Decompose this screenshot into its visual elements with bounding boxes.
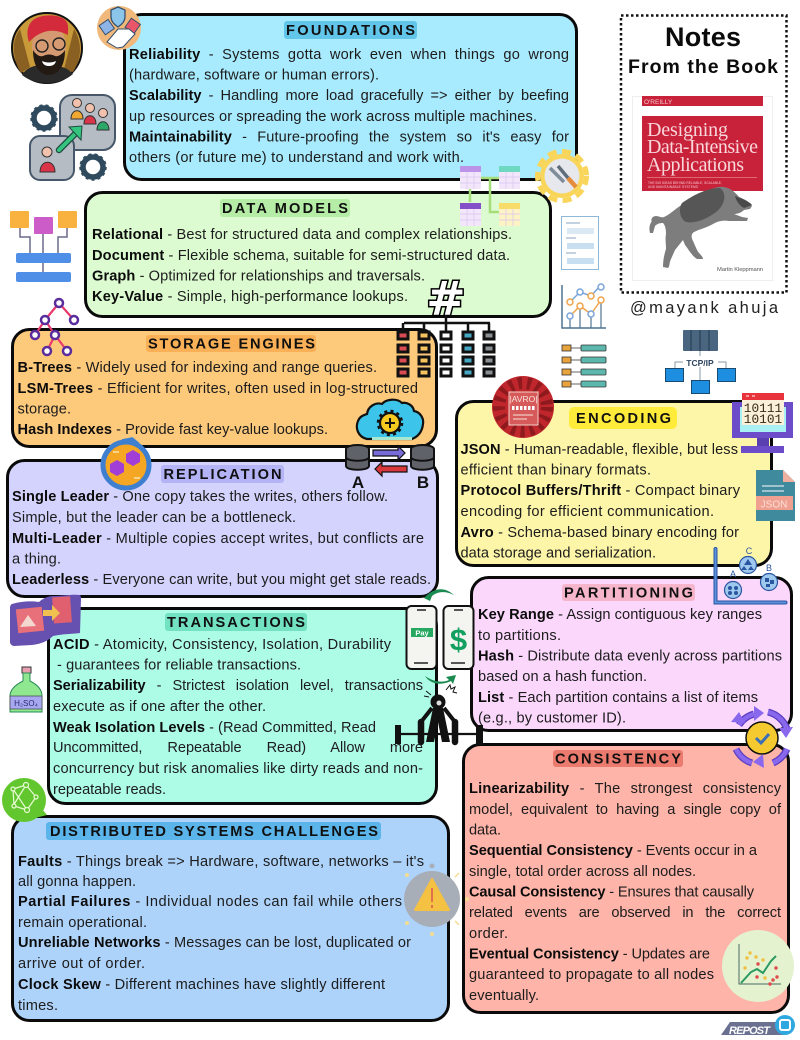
text: replication body: Multi-Leader - Multiple copies accept writes, but conflicts are <box>12 531 424 547</box>
text: foundations body: Scalability - Handling more load gracefully => either by beefing <box>129 88 569 104</box>
text: foundations body: up resources or spreading the work across multiple machines. <box>129 109 537 125</box>
icon: author portrait <box>12 13 82 83</box>
panel: storage engines <box>12 330 436 446</box>
icon: database replication: A <box>352 473 364 492</box>
text: storage engines body: B-Trees - Widely used for indexing and range queries. <box>18 360 377 376</box>
heading: transactions: TRANSACTIONS <box>167 615 305 631</box>
panel: foundations <box>124 14 576 180</box>
icon: acid bottle: H₂SO₄ <box>14 699 38 708</box>
text: transactions body <box>53 637 423 798</box>
text: encoding body: JSON - Human-readable, flexible, but less <box>460 442 738 458</box>
heading: foundations: FOUNDATIONS <box>286 23 415 39</box>
panel: data models <box>86 192 550 316</box>
text: replication body: a thing. <box>12 552 61 568</box>
icon: handshake badge <box>97 6 141 50</box>
text: consistency body: Eventual Consistency - Updates are <box>469 946 710 962</box>
text: partitioning body: to partitions. <box>478 628 561 644</box>
panel: encoding <box>456 402 772 566</box>
text: storage engines body <box>18 360 418 438</box>
icon: hash tree <box>398 272 494 376</box>
text: distributed systems body: Unreliable Networks - Messages can be lost, duplicated or <box>18 935 411 951</box>
text: partitioning body: based on a hash function. <box>478 669 647 685</box>
text: encoding body: Protocol Buffers/Thrift - Compact binary <box>460 483 741 499</box>
icon: cloud gear <box>357 400 423 440</box>
panel: distributed systems challenges <box>12 816 448 1020</box>
text: replication body: Leaderless - Everyone can write, but you might get stale reads. <box>12 572 431 588</box>
icon: payment phones <box>406 589 474 684</box>
book cover: Applications <box>647 154 744 176</box>
panel: replication <box>8 460 438 596</box>
icon: avro badge: |AVRO| <box>510 394 537 404</box>
icon: scatter chart <box>722 930 794 1002</box>
text: distributed systems body: all gonna happen. <box>18 874 136 890</box>
text: distributed systems body: times. <box>18 998 58 1014</box>
text: consistency body: guaranteed to propagate to all nodes <box>469 967 714 983</box>
book cover: THE BIG IDEAS BEHIND RELIABLE, SCALABLE, <box>648 181 722 185</box>
icon: payment phones: $ <box>450 622 467 657</box>
panel: transactions <box>48 608 436 804</box>
heading: distributed systems challenges: DISTRIBUTED SYSTEMS CHALLENGES <box>50 824 378 840</box>
text: consistency body <box>469 781 782 1004</box>
icon: json file: JSON <box>761 500 787 510</box>
heading: notes: Notes <box>665 22 741 52</box>
icon: binary monitor: 10111 <box>744 401 783 416</box>
icon: tree nodes <box>31 299 78 355</box>
text: distributed systems body <box>18 854 424 1014</box>
icon: avro badge <box>492 376 554 438</box>
text: transactions body: concurrency but risk anomalies like dirty reads and non- <box>53 761 423 777</box>
panel: book notes <box>621 16 786 292</box>
icon: database replication <box>346 445 434 492</box>
heading: replication: REPLICATION <box>164 467 282 483</box>
text: foundations body: Reliability - Systems gotta work even when things go wrong <box>129 47 569 63</box>
text: data models body: Document - Flexible schema, suitable for semi-structured data. <box>92 248 510 264</box>
book cover: AND MAINTAINABLE SYSTEMS <box>648 185 698 189</box>
icon: repost badge <box>721 1015 795 1037</box>
text: data models body: Relational - Best for structured data and complex relationships. <box>92 227 512 243</box>
text: transactions body: Serializability - Strictest isolation level, transactions <box>53 678 423 694</box>
text: distributed systems body: Partial Failures - Individual nodes can fail while others <box>18 894 402 910</box>
text: consistency body: model, equivalent to having a single copy of <box>469 802 782 818</box>
icon: cycle check <box>731 706 793 768</box>
text: transactions body: Weak Isolation Levels - (Read Committed, Read <box>53 720 376 736</box>
text: encoding body <box>460 442 741 562</box>
text: storage engines body: LSM-Trees - Efficient for writes, often used in log-structured <box>18 381 418 397</box>
text: distributed systems body: arrive out of order. <box>18 956 145 972</box>
text: encoding body: efficient than binary formats. <box>460 462 651 478</box>
icon: team scaling <box>30 95 115 180</box>
text: consistency body: single, total order across all nodes. <box>469 864 696 880</box>
text: transactions body: repeatable reads. <box>53 782 166 798</box>
icon: tcp/ip network <box>666 330 736 394</box>
text: consistency body: Causal Consistency - Ensures that causally <box>469 884 755 900</box>
text: replication body: Single Leader - One copy takes the writes, others follow. <box>12 489 388 505</box>
text: partitioning body: List - Each partition contains a list of items <box>478 690 758 706</box>
icon: acid bottle <box>10 667 42 712</box>
icon: data model diagram <box>10 211 77 282</box>
icon: warning <box>404 864 469 936</box>
text: foundations body: others (or future me) to understand and work with. <box>129 150 464 166</box>
text: partitioning body: Key Range - Assign contiguous key ranges <box>478 607 762 623</box>
book cover: O'REILLY <box>644 99 673 106</box>
text: consistency body: related events are observed in the correct <box>469 905 781 921</box>
icon: linked tables <box>460 166 520 226</box>
text: storage engines body: storage. <box>18 402 71 418</box>
text: consistency body: order. <box>469 926 508 942</box>
text: transactions body: - guarantees for reliable transactions. <box>57 658 301 674</box>
icon: partition axes: A <box>730 569 736 579</box>
text: consistency body: Linearizability - The strongest consistency <box>469 781 782 797</box>
heading: storage engines: STORAGE ENGINES <box>148 336 315 352</box>
text: replication body <box>12 489 431 588</box>
icon: green network bubble <box>2 778 47 822</box>
boar illustration <box>649 187 752 268</box>
text: data models body <box>92 227 512 305</box>
icon: line chart <box>562 284 606 328</box>
book cover: Data-Intensive <box>647 136 758 158</box>
icon: flow list <box>562 345 606 387</box>
icon: partition axes: B <box>766 563 772 573</box>
text: encoding body: encoding for efficient communication. <box>460 504 714 520</box>
heading: from the book: From the Book <box>628 56 778 78</box>
heading: consistency: CONSISTENCY <box>555 752 681 768</box>
icon: repost badge: REPOST <box>729 1025 771 1037</box>
text: partitioning body: (e.g., by customer ID). <box>478 710 626 726</box>
text: storage engines body: Hash Indexes - Provide fast key-value lookups. <box>18 422 328 438</box>
text: consistency body: Sequential Consistency - Events occur in a <box>469 843 758 859</box>
icon: partition axes <box>716 546 786 602</box>
icon: database replication: B <box>417 473 429 492</box>
heading: encoding: ENCODING <box>576 411 671 427</box>
text: replication body: Simple, but the leader can be a bottleneck. <box>12 510 296 526</box>
icon: document <box>562 216 598 270</box>
text: data models body: Key-Value - Simple, high-performance lookups. <box>92 289 408 305</box>
icon: binary monitor: 10101 <box>744 412 783 427</box>
heading: data models: DATA MODELS <box>222 201 348 217</box>
heading: partitioning: PARTITIONING <box>564 586 693 602</box>
text: data models body: Graph - Optimized for relationships and traversals. <box>92 268 425 284</box>
text: foundations body: Maintainability - Future-proofing the system so it's easy for <box>129 130 569 146</box>
text: transactions body: ACID - Atomicity, Consistency, Isolation, Durability <box>53 637 392 653</box>
text: consistency body: eventually. <box>469 988 539 1004</box>
icon: repair gear <box>538 152 586 200</box>
icon: binary monitor <box>732 393 793 453</box>
text: foundations body: (hardware, software or human errors). <box>129 68 379 84</box>
book cover: Designing <box>647 119 728 141</box>
text: partitioning body: Hash - Distribute data evenly across partitions <box>478 648 782 664</box>
text: distributed systems body: Faults - Things break => Hardware, software, networks – it's <box>18 854 424 870</box>
book cover: Martin Kleppmann <box>717 267 763 273</box>
icon: image transfer <box>10 595 81 646</box>
text: transactions body: execute as if one after the other. <box>53 699 266 715</box>
panel: consistency <box>464 744 788 1012</box>
text: transactions body: Uncommitted, Repeatable Read) Allow more <box>53 740 423 756</box>
text: encoding body: Avro - Schema-based binary encoding for <box>460 525 739 541</box>
text: distributed systems body: remain operational. <box>18 915 147 931</box>
icon: hash tree: # <box>426 272 466 327</box>
book cover <box>632 96 772 280</box>
icon: payment phones: Pay <box>415 628 429 638</box>
text: encoding body: data storage and serialization. <box>460 546 656 562</box>
text: distributed systems body: Clock Skew - Different machines have slightly different <box>18 977 385 993</box>
text: consistency body: data. <box>469 822 501 838</box>
icon: replication badge <box>103 439 149 488</box>
text: partitioning body <box>478 607 782 726</box>
icon: partition axes: C <box>746 546 753 556</box>
icon: tcp/ip network: TCP/IP <box>686 358 714 368</box>
text: author handle: @mayank ahuja <box>630 299 779 317</box>
heading: encoding <box>569 407 677 429</box>
icon: json file <box>756 470 795 521</box>
text: foundations body <box>129 47 569 166</box>
panel: partitioning <box>472 578 792 730</box>
icon: weightlifter <box>395 685 483 745</box>
